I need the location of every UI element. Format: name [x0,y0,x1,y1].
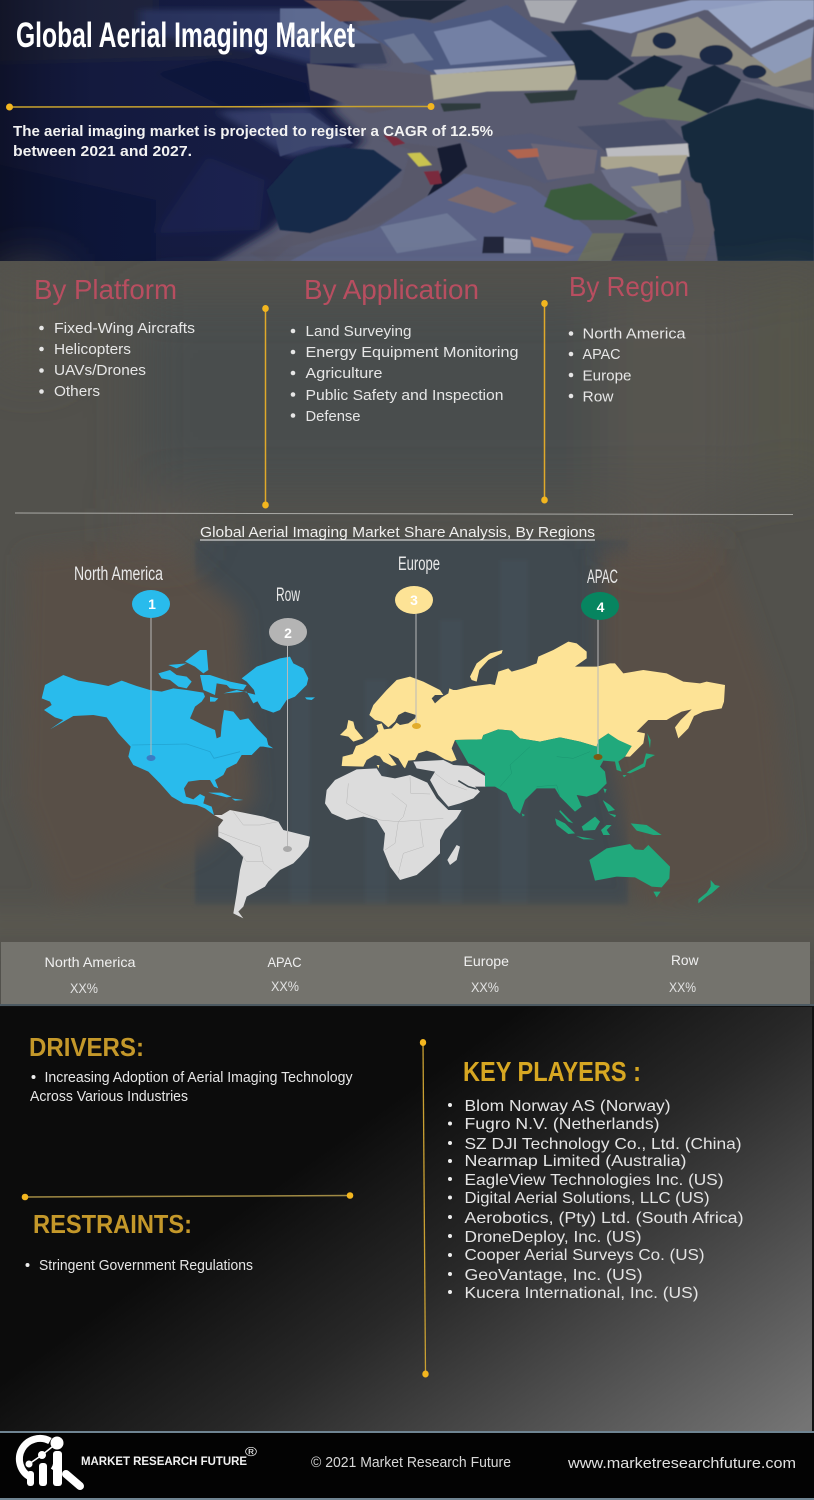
restraints: Stringent Government Regulations [39,1258,253,1274]
pin 2: Row: Row [276,585,300,606]
icon: logo [19,1436,80,1486]
key players: GeoVantage, Inc. (US) [464,1267,642,1284]
key players: Aerobotics, (Pty) Ltd. (South Africa) [464,1210,744,1227]
CAGR description: between 2021 and 2027. [13,144,192,160]
region: Europe and Russia [340,642,725,768]
panel: by region: APAC [582,346,621,363]
pin 4: APAC [581,567,619,760]
panel: by application: By Application [304,274,479,305]
header title: Global Aerial Imaging Market [16,16,355,55]
panel: by platform: Others [54,383,100,400]
share table [0,942,814,1006]
region: North America [42,650,315,815]
key players: Nearmap Limited (Australia) [464,1153,686,1170]
share table: XX% [669,979,696,995]
footer: MARKET RESEARCH FUTURE [81,1456,247,1468]
region: Africa and Middle East [325,760,486,880]
background photo: tablet and hands [195,540,628,905]
pin 4: APAC: APAC [587,567,618,588]
divider: drivers / restraints [22,1192,353,1200]
pin 1: North America: 1 [148,596,156,612]
key players: EagleView Technologies Inc. (US) [464,1172,724,1189]
photo: left dark area [0,0,384,273]
panel: by region [569,271,689,406]
CAGR description [13,124,493,160]
drivers: Increasing Adoption of Aerial Imaging Technology [44,1070,353,1086]
key players: Blom Norway AS (Norway) [464,1098,670,1115]
divider: application / region [541,300,548,504]
CAGR description: The aerial imaging market is projected to register a CAGR of 12.5% [13,124,493,140]
share table: Europe [464,953,509,969]
panel: by application: Public Safety and Inspection [306,387,504,404]
share table: Row [671,952,699,968]
horizontal divider [15,513,793,514]
panel: by region: Row [582,388,614,406]
key players: Kucera International, Inc. (US) [464,1285,698,1302]
footer [0,1431,814,1500]
footer: © 2021 Market Research Future [311,1454,511,1471]
pin 3: Europe [395,554,440,729]
photo: right detailed area [250,0,814,263]
restraints: RESTRAINTS: [33,1209,192,1239]
panel: by platform [34,274,195,400]
panel: by application: Energy Equipment Monitoring [306,344,518,361]
header banner: aerial photo [0,0,814,273]
footer: ® [245,1444,258,1459]
panel: by application: Defense [306,408,360,425]
restraints [26,1209,253,1274]
key players: DroneDeploy, Inc. (US) [464,1229,642,1246]
divider: platform / application [262,305,269,508]
panel: by platform: Fixed-Wing Aircrafts [54,320,195,337]
drivers: DRIVERS: [29,1032,144,1062]
pin 1: North America: North America [74,564,163,585]
share table: North America [44,954,136,970]
bottom panel background [0,1007,812,1431]
panel: by region: Europe [582,368,632,384]
panel: by region: By Region [569,271,689,302]
share table: XX% [471,979,499,995]
world map [42,642,725,918]
pin 1: North America [74,564,170,761]
key players [448,1056,744,1302]
pin 3: Europe: Europe [398,554,440,575]
pin 3: Europe: 3 [410,592,418,608]
panel: by platform: UAVs/Drones [54,362,146,379]
middle panel background [0,261,814,1006]
header divider with dots [6,103,434,110]
footer: www.marketresearchfuture.com [567,1455,796,1472]
key players: SZ DJI Technology Co., Ltd. (China) [464,1136,742,1153]
panel: by platform: Helicopters [54,341,131,358]
drivers [29,1032,353,1105]
share table: XX% [70,980,98,996]
panel: by application [291,274,518,425]
panel: by application: Land Surveying [306,323,412,340]
share table: APAC [268,954,302,970]
drivers: Across Various Industries [30,1089,188,1105]
region: Asia Pacific [455,729,720,903]
pin 2: Row: 2 [284,625,292,641]
key players: KEY PLAYERS : [463,1056,641,1087]
region: South America [214,810,310,918]
panel: by application: Agriculture [306,365,382,382]
key players: Digital Aerial Solutions, LLC (US) [464,1190,710,1207]
share table: XX% [271,978,299,994]
pin 4: APAC: 4 [597,599,605,615]
panel: by platform: By Platform [34,274,177,305]
panel: by region: North America [582,326,686,342]
map chart heading: Global Aerial Imaging Market Share Analysis, By Regions [200,524,595,541]
divider: restraints / key players [420,1039,429,1378]
key players: Cooper Aerial Surveys Co. (US) [464,1247,704,1264]
key players: Fugro N.V. (Netherlands) [464,1116,660,1133]
pin 2: Row [269,585,307,852]
